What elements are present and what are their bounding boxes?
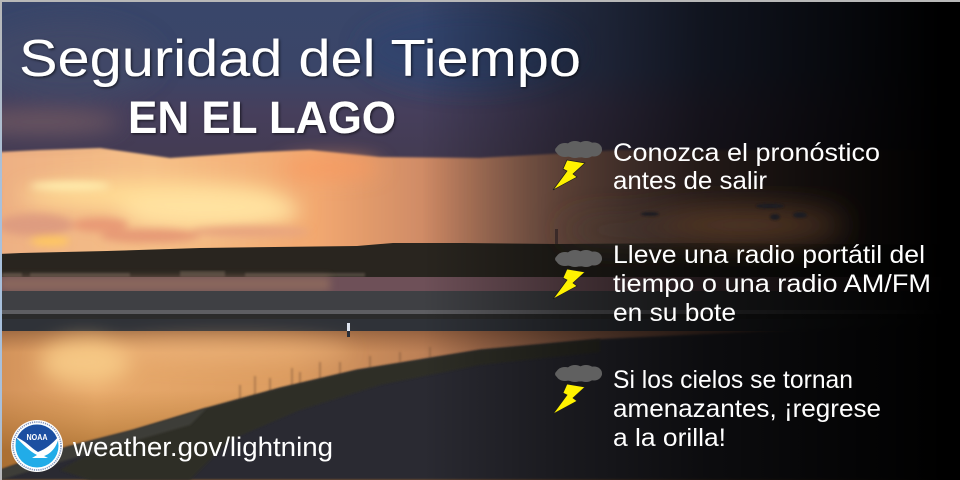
text: tip 3: Si los cielos se tornan	[613, 366, 853, 394]
upper sky	[0, 0, 960, 170]
far water	[0, 277, 960, 291]
text: tip 2	[613, 241, 931, 327]
text: tip 3: a la orilla!	[613, 424, 726, 452]
icon: storm cloud with lightning 2	[553, 250, 602, 299]
text: tip 1: antes de salir	[613, 167, 767, 195]
title: Seguridad del Tiempo	[19, 30, 581, 88]
title	[19, 30, 581, 143]
url text: weather.gov/lightning	[72, 432, 333, 462]
lower sky	[0, 148, 960, 255]
water tower	[555, 229, 558, 244]
text: tip 2: en su bote	[613, 299, 736, 327]
reeds	[240, 347, 430, 400]
text: tip 2: Lleve una radio portátil del	[613, 241, 925, 269]
hills	[0, 243, 960, 278]
text: tip 3: amenazantes, ¡regrese	[613, 395, 881, 423]
icon: NOAA logo: NOAA	[26, 433, 48, 442]
icon: storm cloud with lightning 1	[553, 141, 602, 190]
text: tip 2: tiempo o una radio AM/FM	[613, 270, 931, 298]
edge border	[0, 0, 2, 480]
grassy shore edge	[60, 339, 600, 480]
text: tip 1	[613, 139, 880, 195]
text: tip 3	[613, 366, 881, 452]
buoy	[347, 323, 350, 337]
shore	[0, 322, 960, 480]
levee	[0, 291, 960, 310]
near water	[0, 319, 960, 480]
icon: NOAA logo	[11, 420, 63, 472]
subtitle: EN EL LAGO	[128, 92, 396, 143]
text: tip 1: Conozca el pronóstico	[613, 139, 880, 167]
icon: storm cloud with lightning 3	[553, 365, 602, 414]
